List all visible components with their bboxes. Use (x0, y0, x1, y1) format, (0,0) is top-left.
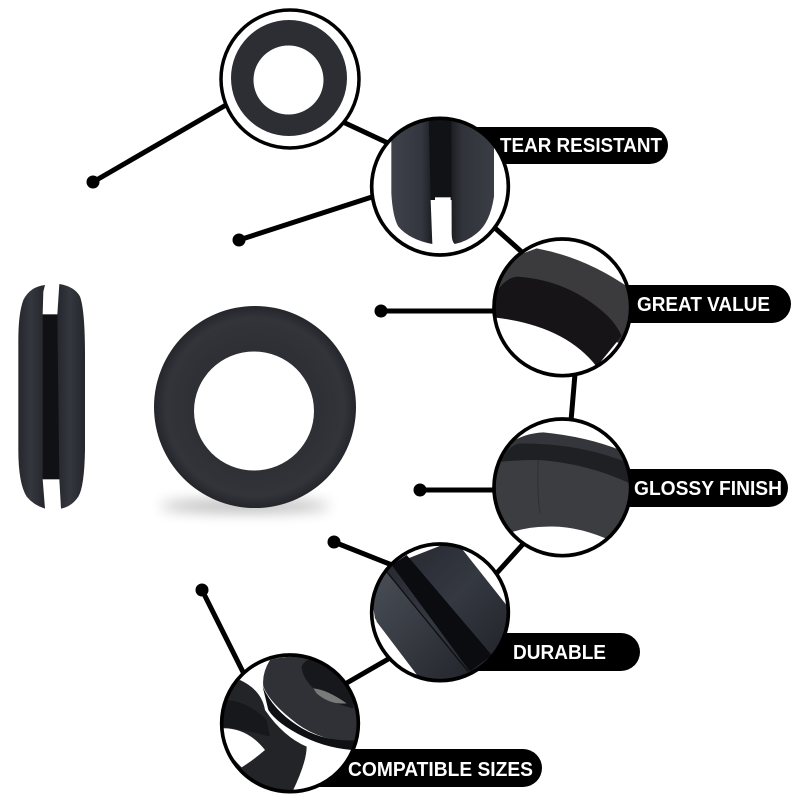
label text (348, 134, 782, 781)
pill: compatible sizes (290, 749, 542, 787)
grommet slot close-up (391, 113, 494, 247)
connector: tear resistant circle to anchor dot (232, 196, 375, 246)
front view grommet (154, 306, 356, 512)
grommet ground shadow (160, 500, 330, 512)
pill: tear resistant (440, 127, 668, 164)
small grommet ring (231, 20, 347, 136)
label: tear resistant: TEAR RESISTANT (500, 134, 662, 157)
magnifier: compatible sizes (210, 655, 363, 797)
lens fill (494, 239, 631, 376)
pill: great value (560, 285, 791, 323)
lens fill (494, 419, 631, 556)
magnifier: tear resistant (372, 113, 508, 255)
lens outline (221, 10, 359, 148)
side grommet left flange (18, 285, 45, 509)
magnifier: top view (221, 10, 359, 148)
lens outline (222, 655, 358, 792)
connector: glossy finish circle to durable circle (495, 543, 524, 575)
connector: top view circle to anchor dot (86, 105, 226, 188)
pill: glossy finish (560, 469, 788, 507)
magnifier: great value (487, 239, 637, 376)
connector: tear resistant circle to great value circle (495, 228, 524, 254)
grommet ring (154, 306, 356, 508)
lens fill (372, 544, 508, 681)
lens fill (372, 118, 508, 255)
magnifier: glossy finish (492, 417, 630, 558)
lens outline (372, 544, 508, 681)
connector: durable circle to compatible sizes circle (345, 658, 390, 684)
connector: top view circle to tear resistant circle (343, 122, 390, 144)
label: glossy finish: GLOSSY FINISH (634, 477, 782, 500)
lens fill (222, 655, 358, 792)
glossy surface close-up (496, 432, 629, 538)
pill: durable (440, 633, 640, 671)
curved band close-up (496, 248, 629, 365)
side view grommet (18, 284, 85, 509)
label: compatible sizes: COMPATIBLE SIZES (348, 758, 533, 781)
connector: great value circle to anchor dot (374, 304, 495, 318)
connector lines and anchor dots (86, 105, 575, 684)
label pills (290, 127, 791, 787)
connector: compatible sizes circle to anchor dot (196, 584, 244, 674)
lens outline (494, 239, 631, 376)
label: durable: DURABLE (513, 641, 606, 664)
lens outline (372, 118, 508, 255)
side grommet channel (42, 314, 60, 479)
connector: glossy finish circle to anchor dot (414, 484, 495, 496)
label: great value: GREAT VALUE (637, 293, 770, 316)
stacked grommets close-up (224, 656, 356, 790)
connector: great value circle to glossy finish circle (571, 374, 575, 421)
lens outline (494, 419, 631, 556)
magnifier: durable (368, 540, 512, 683)
side grommet right flange (57, 284, 85, 509)
diagonal band close-up (374, 546, 506, 679)
connector: durable circle to anchor dot (328, 536, 392, 565)
